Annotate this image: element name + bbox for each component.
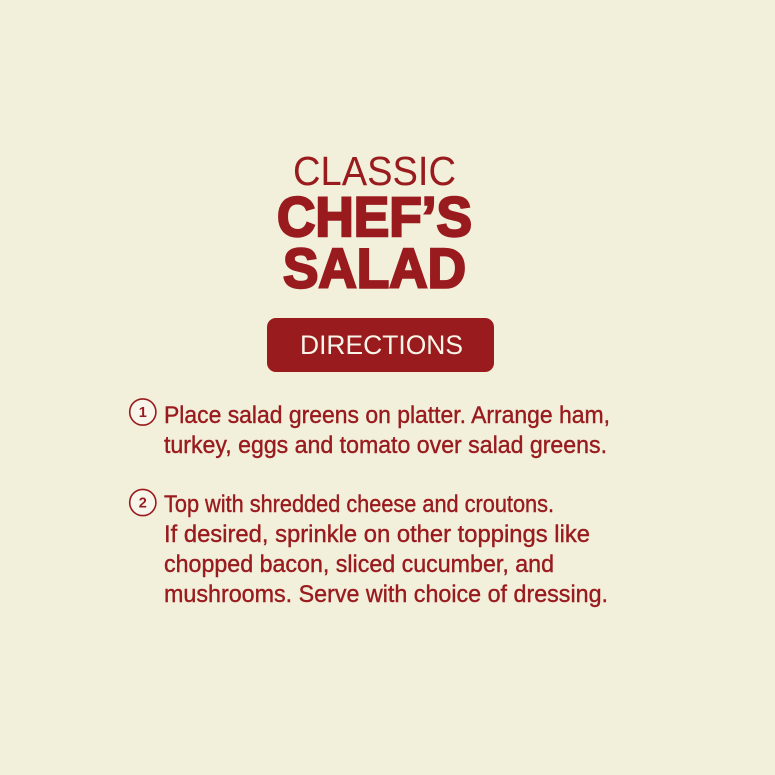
title: CLASSIC bbox=[293, 148, 456, 194]
icon: number 1 bbox=[130, 399, 156, 425]
icon: number 2 bbox=[130, 489, 156, 516]
title: SALAD bbox=[283, 237, 466, 300]
step 2 bbox=[130, 489, 608, 608]
step 2 text: Top with shredded cheese and croutons. bbox=[164, 491, 554, 518]
step 1 text: Place salad greens on platter. Arrange ham, bbox=[164, 402, 610, 429]
step 1 bbox=[130, 399, 610, 459]
icon: number 2: 2 bbox=[139, 496, 147, 512]
step 2 text: If desired, sprinkle on other toppings like bbox=[164, 521, 590, 548]
icon: number 1: 1 bbox=[139, 405, 147, 421]
step 1 text bbox=[164, 402, 610, 459]
title bbox=[277, 148, 472, 300]
step 2 text: mushrooms. Serve with choice of dressing. bbox=[164, 581, 608, 608]
step 2 text: chopped bacon, sliced cucumber, and bbox=[164, 551, 554, 578]
step 1 text: turkey, eggs and tomato over salad greens. bbox=[164, 432, 607, 459]
step 2 text bbox=[164, 491, 608, 608]
title: CHEF’S bbox=[277, 185, 472, 248]
directions badge bbox=[267, 318, 494, 372]
directions badge: DIRECTIONS bbox=[300, 330, 463, 360]
